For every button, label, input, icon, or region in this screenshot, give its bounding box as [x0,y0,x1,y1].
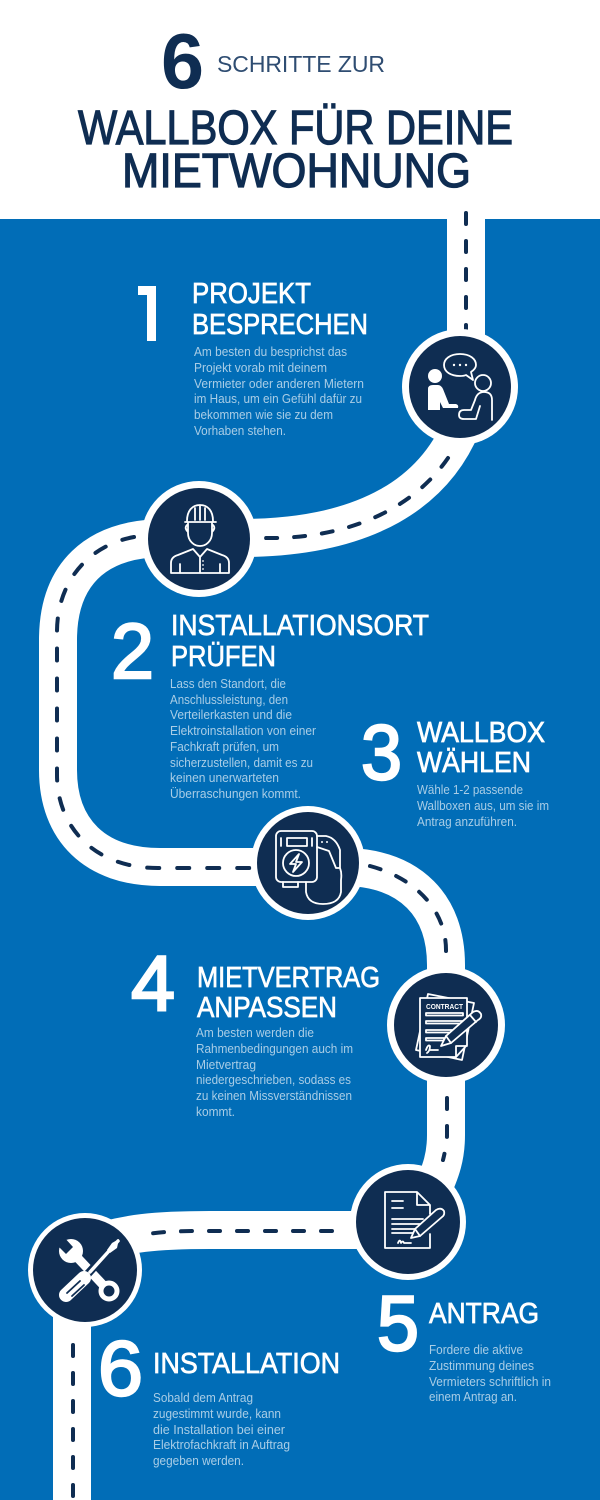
step 6: text: 6 [98,1324,143,1412]
step 1: text: BESPRECHEN [192,309,368,341]
step 5: text: 5 [377,1279,419,1367]
step 5: text: Fordere die aktive [429,1343,523,1357]
step 1: text: 1 [137,270,163,358]
step 2: text: INSTALLATIONSORT [171,610,429,642]
step 5: text: Vermieters schriftlich in [429,1375,551,1389]
step 2: text: PRÜFEN [171,641,276,673]
road [57,205,466,1500]
step 4: text: niedergeschrieben, sodass es [196,1073,351,1087]
step 6: text: Elektrofachkraft in Auftrag [153,1438,290,1452]
step 6: text: INSTALLATION [153,1348,340,1380]
step 4: icon contract: CONTRACT [426,1002,463,1011]
step 6: icon tools [28,1213,142,1327]
step 4: icon contract [387,966,505,1084]
step 2: text: Überraschungen kommt. [170,787,301,801]
step 2: text [111,607,429,801]
step 4: text: zu keinen Missverständnissen [196,1089,352,1103]
step 6: text: Sobald dem Antrag [153,1391,253,1405]
step 2: text: Elektroinstallation von einer [170,724,316,738]
step 2: text: Fachkraft prüfen, um [170,740,279,754]
title: MIETWOHNUNG [122,145,471,198]
step 4: text: Rahmenbedingungen auch im [196,1042,353,1056]
step 5: text: ANTRAG [429,1298,539,1330]
step 3: text: Wallboxen aus, um sie im [417,799,549,813]
step 3: icon charger [251,806,365,920]
step 3: text: Antrag anzuführen. [417,815,517,829]
step 3: text: WALLBOX [417,717,545,749]
step 2: text: 2 [111,607,154,695]
step 5: text: einem Antrag an. [429,1390,517,1404]
step 3: text: WÄHLEN [417,747,531,779]
step 5: icon document [350,1164,466,1280]
step 2: icon worker [141,481,257,597]
step 4: text: 4 [131,939,175,1027]
step 1: text: Vermieter oder anderen Mietern [194,377,364,391]
step 5: text [377,1279,551,1404]
step 1: text: Am besten du besprichst das [194,345,347,359]
step 1: text: PROJEKT [192,278,311,310]
step 2: text: Lass den Standort, die [170,677,286,691]
step 3: text: Wähle 1-2 passende [417,783,523,797]
step 5: text: Zustimmung deines [429,1359,534,1373]
step 6: text [98,1324,340,1468]
step 3: text: 3 [361,708,402,796]
step 4: text [131,939,380,1119]
step 1: text: Projekt vorab mit deinem [194,361,327,375]
step 4: text: ANPASSEN [197,992,337,1024]
title [78,17,513,198]
title: 6 [161,17,204,105]
step 2: text: sicherzustellen, damit es zu [170,756,313,770]
step 6: text: gegeben werden. [153,1454,244,1468]
step 4: text: Mietvertrag [196,1058,256,1072]
step 4: text: MIETVERTRAG [197,962,380,994]
title: WALLBOX FÜR DEINE [78,102,513,155]
step 4: text: Am besten werden die [196,1026,314,1040]
step 3: text [361,708,549,829]
step 2: text: Anschlussleistung, den [170,693,288,707]
step 1: text: bekommen wie sie zu dem [194,408,333,422]
step 6: text: zugestimmt wurde, kann [153,1407,281,1421]
step 1: text [137,270,368,438]
step 1: text: im Haus, um ein Gefühl dafür zu [194,392,362,406]
step 2: text: keinen unerwarteten [170,771,279,785]
step 6: text: die Installation bei einer [153,1423,285,1437]
step 1: text: Vorhaben stehen. [194,424,286,438]
step 2: text: Verteilerkasten und die [170,708,292,722]
title: SCHRITTE ZUR [217,51,385,77]
step 1: icon people talking [402,329,518,445]
step 4: text: kommt. [196,1105,235,1119]
